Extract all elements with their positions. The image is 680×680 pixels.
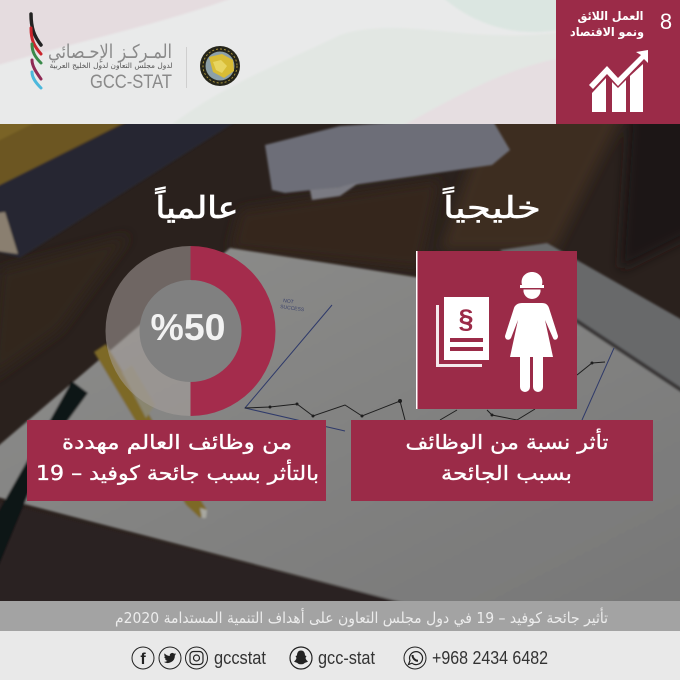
icon: woman worker: [505, 272, 558, 392]
panel: SDG 8: [556, 0, 680, 124]
header background: [0, 0, 680, 130]
panel: global caption: [27, 420, 326, 501]
icon: facebook: f: [140, 651, 146, 668]
notebook handwriting: SUCCESS: [280, 304, 305, 313]
logo title arabic: المـركـز الإحـصائي: [48, 41, 172, 63]
icon: instagram: [186, 647, 208, 669]
icon: growth chart: [589, 50, 648, 112]
icon: ribbon: [31, 14, 41, 88]
footer contact strip: [0, 631, 680, 680]
logo: GCC-STAT: [31, 14, 172, 93]
panel: regional caption: [351, 420, 653, 501]
SDG number: 8: [660, 9, 672, 34]
chart lines on notebook: [245, 305, 614, 431]
icon: whatsapp: [404, 647, 426, 669]
account name: gccstat: gccstat: [214, 648, 266, 668]
footer title bar: [0, 601, 680, 631]
caption line 1: تأثر نسبة من الوظائف: [406, 428, 608, 454]
caption line 2: بالتأثر بسبب جائحة كوفيد – 19: [36, 459, 319, 485]
SDG title line 1: العمل اللائق: [578, 9, 644, 23]
donut value: %50: [150, 307, 226, 348]
icon: facebook: [132, 647, 154, 669]
caption line 2: بسبب الجائحة: [441, 461, 572, 485]
phone number: +968 2434 6482: [432, 648, 548, 668]
icon: twitter: [159, 647, 181, 669]
SDG title line 2: ونمو الاقتصاد: [570, 25, 644, 40]
icon: snapchat: [290, 647, 312, 669]
icon: law document: §: [458, 304, 474, 334]
icon: law document: [436, 297, 489, 367]
footer title text: تأثير جائحة كوفيد – 19 في دول مجلس التعاون على أهداف التنمية المستدامة 2020م: [115, 607, 608, 628]
caption line 1: من وظائف العالم مهددة: [62, 430, 292, 454]
background photo: notebook on desk: [0, 110, 680, 610]
logo subtitle arabic: لدول مجلس التعاون لدول الخليج العربية: [50, 61, 172, 70]
heading: regional: خليجياً: [443, 186, 541, 226]
logo name: GCC-STAT: [90, 72, 172, 93]
icon: GCC emblem: [200, 46, 240, 86]
heading: global: عالمياً: [155, 186, 238, 226]
account name: gcc-stat: gcc-stat: [318, 648, 375, 668]
notebook handwriting: [280, 298, 304, 312]
icon panel: worker and law document: [416, 251, 577, 409]
donut chart: 50%: [106, 246, 276, 416]
divider line: [186, 47, 187, 88]
notebook handwriting: NOT: [283, 298, 294, 305]
